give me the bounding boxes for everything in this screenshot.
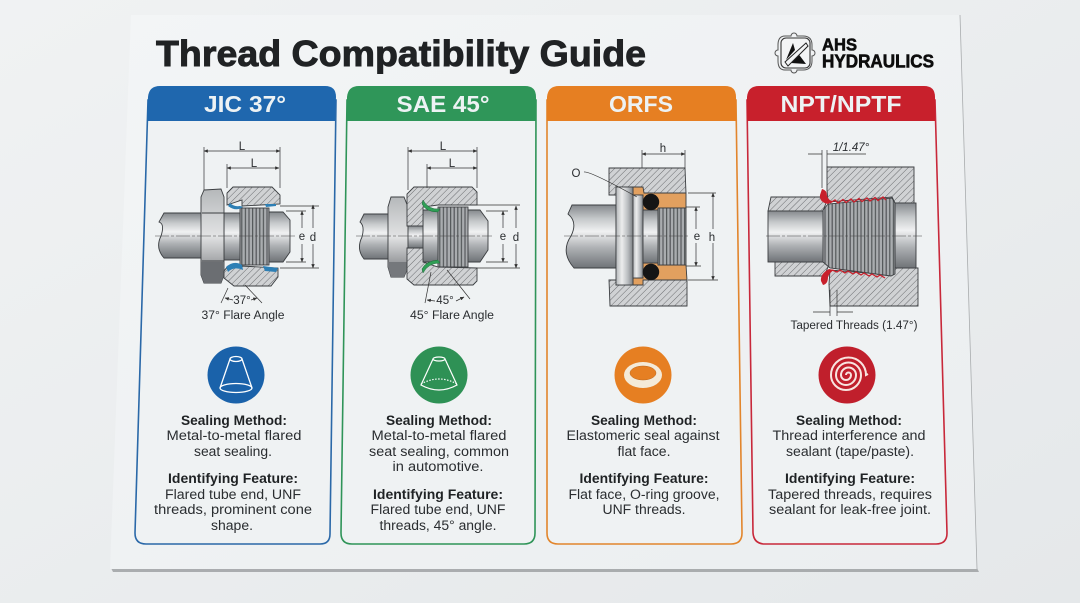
panel: SAE 45° bbox=[341, 86, 536, 544]
text: identifying feature: shape. bbox=[211, 518, 253, 533]
panel outline bbox=[547, 100, 742, 544]
heading: SAE 45° bbox=[396, 91, 490, 117]
diagram: NPT tapered thread bbox=[766, 150, 922, 316]
dimension labels: d bbox=[310, 232, 316, 244]
text: identifying feature: Flat face, O-ring groove, bbox=[568, 487, 720, 502]
dimension label: 1/1.47° bbox=[833, 142, 870, 154]
heading: NPT/NPTF bbox=[780, 91, 902, 117]
text: identifying feature bbox=[370, 487, 506, 533]
dimension labels: e bbox=[694, 231, 700, 243]
sealant bbox=[820, 189, 886, 285]
dimension labels: 45° bbox=[436, 295, 454, 307]
logo wordmark: AHS bbox=[822, 34, 857, 54]
diagram caption: 37° Flare Angle bbox=[202, 310, 284, 322]
text: sealing method: in automotive. bbox=[392, 459, 484, 474]
dimension labels: h bbox=[660, 143, 666, 155]
text: identifying feature: sealant for leak-free joint. bbox=[769, 502, 931, 517]
dimension labels: L bbox=[440, 141, 447, 153]
header bar bbox=[147, 86, 336, 121]
header bar bbox=[347, 86, 536, 121]
panel outline bbox=[747, 100, 947, 544]
text: sealing method bbox=[166, 413, 302, 459]
text: identifying feature bbox=[768, 471, 932, 517]
text: identifying feature: Identifying Feature: bbox=[373, 487, 503, 502]
dimension labels: L bbox=[239, 141, 246, 153]
text: sealing method: seat sealing, common bbox=[369, 444, 509, 459]
text: identifying feature: threads, prominent cone bbox=[154, 502, 312, 517]
header bar bbox=[747, 86, 935, 121]
panel outline bbox=[341, 100, 536, 544]
text: identifying feature: Identifying Feature: bbox=[580, 471, 708, 486]
text: identifying feature bbox=[154, 471, 312, 533]
text: identifying feature: Identifying Feature: bbox=[785, 471, 915, 486]
text: sealing method: Sealing Method: bbox=[591, 413, 697, 428]
panel: NPT/NPTF bbox=[747, 86, 947, 544]
diagram: SAE flare fitting bbox=[356, 147, 520, 303]
panel: ORFS bbox=[547, 86, 742, 544]
logo emblem bbox=[775, 33, 815, 73]
dimension labels: L bbox=[449, 158, 456, 170]
heading: JIC 37° bbox=[204, 91, 286, 117]
text: sealing method: sealant (tape/paste). bbox=[786, 444, 914, 459]
dimension labels: d bbox=[513, 232, 519, 244]
dimension labels bbox=[572, 143, 715, 244]
diagram caption: 45° Flare Angle bbox=[410, 310, 494, 322]
header bar bbox=[547, 86, 736, 121]
text: sealing method: Sealing Method: bbox=[386, 413, 492, 428]
dimension labels: 37° bbox=[233, 295, 251, 307]
panel: JIC 37° bbox=[135, 86, 336, 544]
text: identifying feature: Flared tube end, UNF bbox=[370, 502, 506, 517]
text: sealing method: Elastomeric seal against bbox=[566, 428, 720, 443]
heading: ORFS bbox=[609, 91, 673, 117]
dimension labels: L bbox=[251, 158, 258, 170]
dimension labels: h bbox=[709, 232, 715, 244]
text: identifying feature bbox=[568, 471, 720, 517]
title: Thread Compatibility Guide bbox=[156, 33, 646, 74]
dimension labels: O bbox=[572, 168, 581, 180]
text: identifying feature: Identifying Feature: bbox=[168, 471, 298, 486]
text: sealing method: Metal-to-metal flared bbox=[372, 428, 506, 443]
text: identifying feature: UNF threads. bbox=[602, 502, 686, 517]
diagram: JIC flare fitting bbox=[155, 147, 319, 303]
text: identifying feature: Tapered threads, requires bbox=[768, 487, 932, 502]
dimension labels: e bbox=[500, 231, 506, 243]
logo: AHS Hydraulics bbox=[775, 33, 934, 73]
icon: O-ring bbox=[614, 346, 672, 404]
O-rings bbox=[643, 194, 659, 280]
paper sheet bbox=[110, 15, 977, 569]
diagram: ORFS fitting bbox=[564, 150, 718, 306]
text: sealing method: flat face. bbox=[618, 444, 670, 459]
icon: wide cone bbox=[410, 346, 468, 404]
text: sealing method bbox=[566, 413, 720, 459]
diagram caption: Tapered Threads (1.47°) bbox=[790, 320, 918, 332]
text: identifying feature: threads, 45° angle. bbox=[380, 518, 496, 533]
text: sealing method bbox=[369, 413, 509, 474]
text: sealing method: Thread interference and bbox=[772, 428, 926, 443]
dimension labels bbox=[233, 141, 316, 307]
text: sealing method: seat sealing. bbox=[194, 444, 272, 459]
text: sealing method: Sealing Method: bbox=[181, 413, 287, 428]
text: sealing method bbox=[772, 413, 926, 459]
dimension labels bbox=[436, 141, 519, 307]
dimension labels: e bbox=[299, 231, 305, 243]
paper shadow bbox=[111, 568, 979, 572]
text: sealing method: Metal-to-metal flared bbox=[166, 428, 302, 443]
panel outline bbox=[135, 100, 336, 544]
paper right edge bbox=[960, 15, 977, 569]
text: sealing method: Sealing Method: bbox=[796, 413, 902, 428]
icon: spiral bbox=[818, 346, 876, 404]
text: identifying feature: Flared tube end, UNF bbox=[165, 487, 301, 502]
icon: cone bbox=[208, 346, 264, 404]
logo: AHS Hydraulics: HYDRAULICS bbox=[822, 52, 934, 72]
